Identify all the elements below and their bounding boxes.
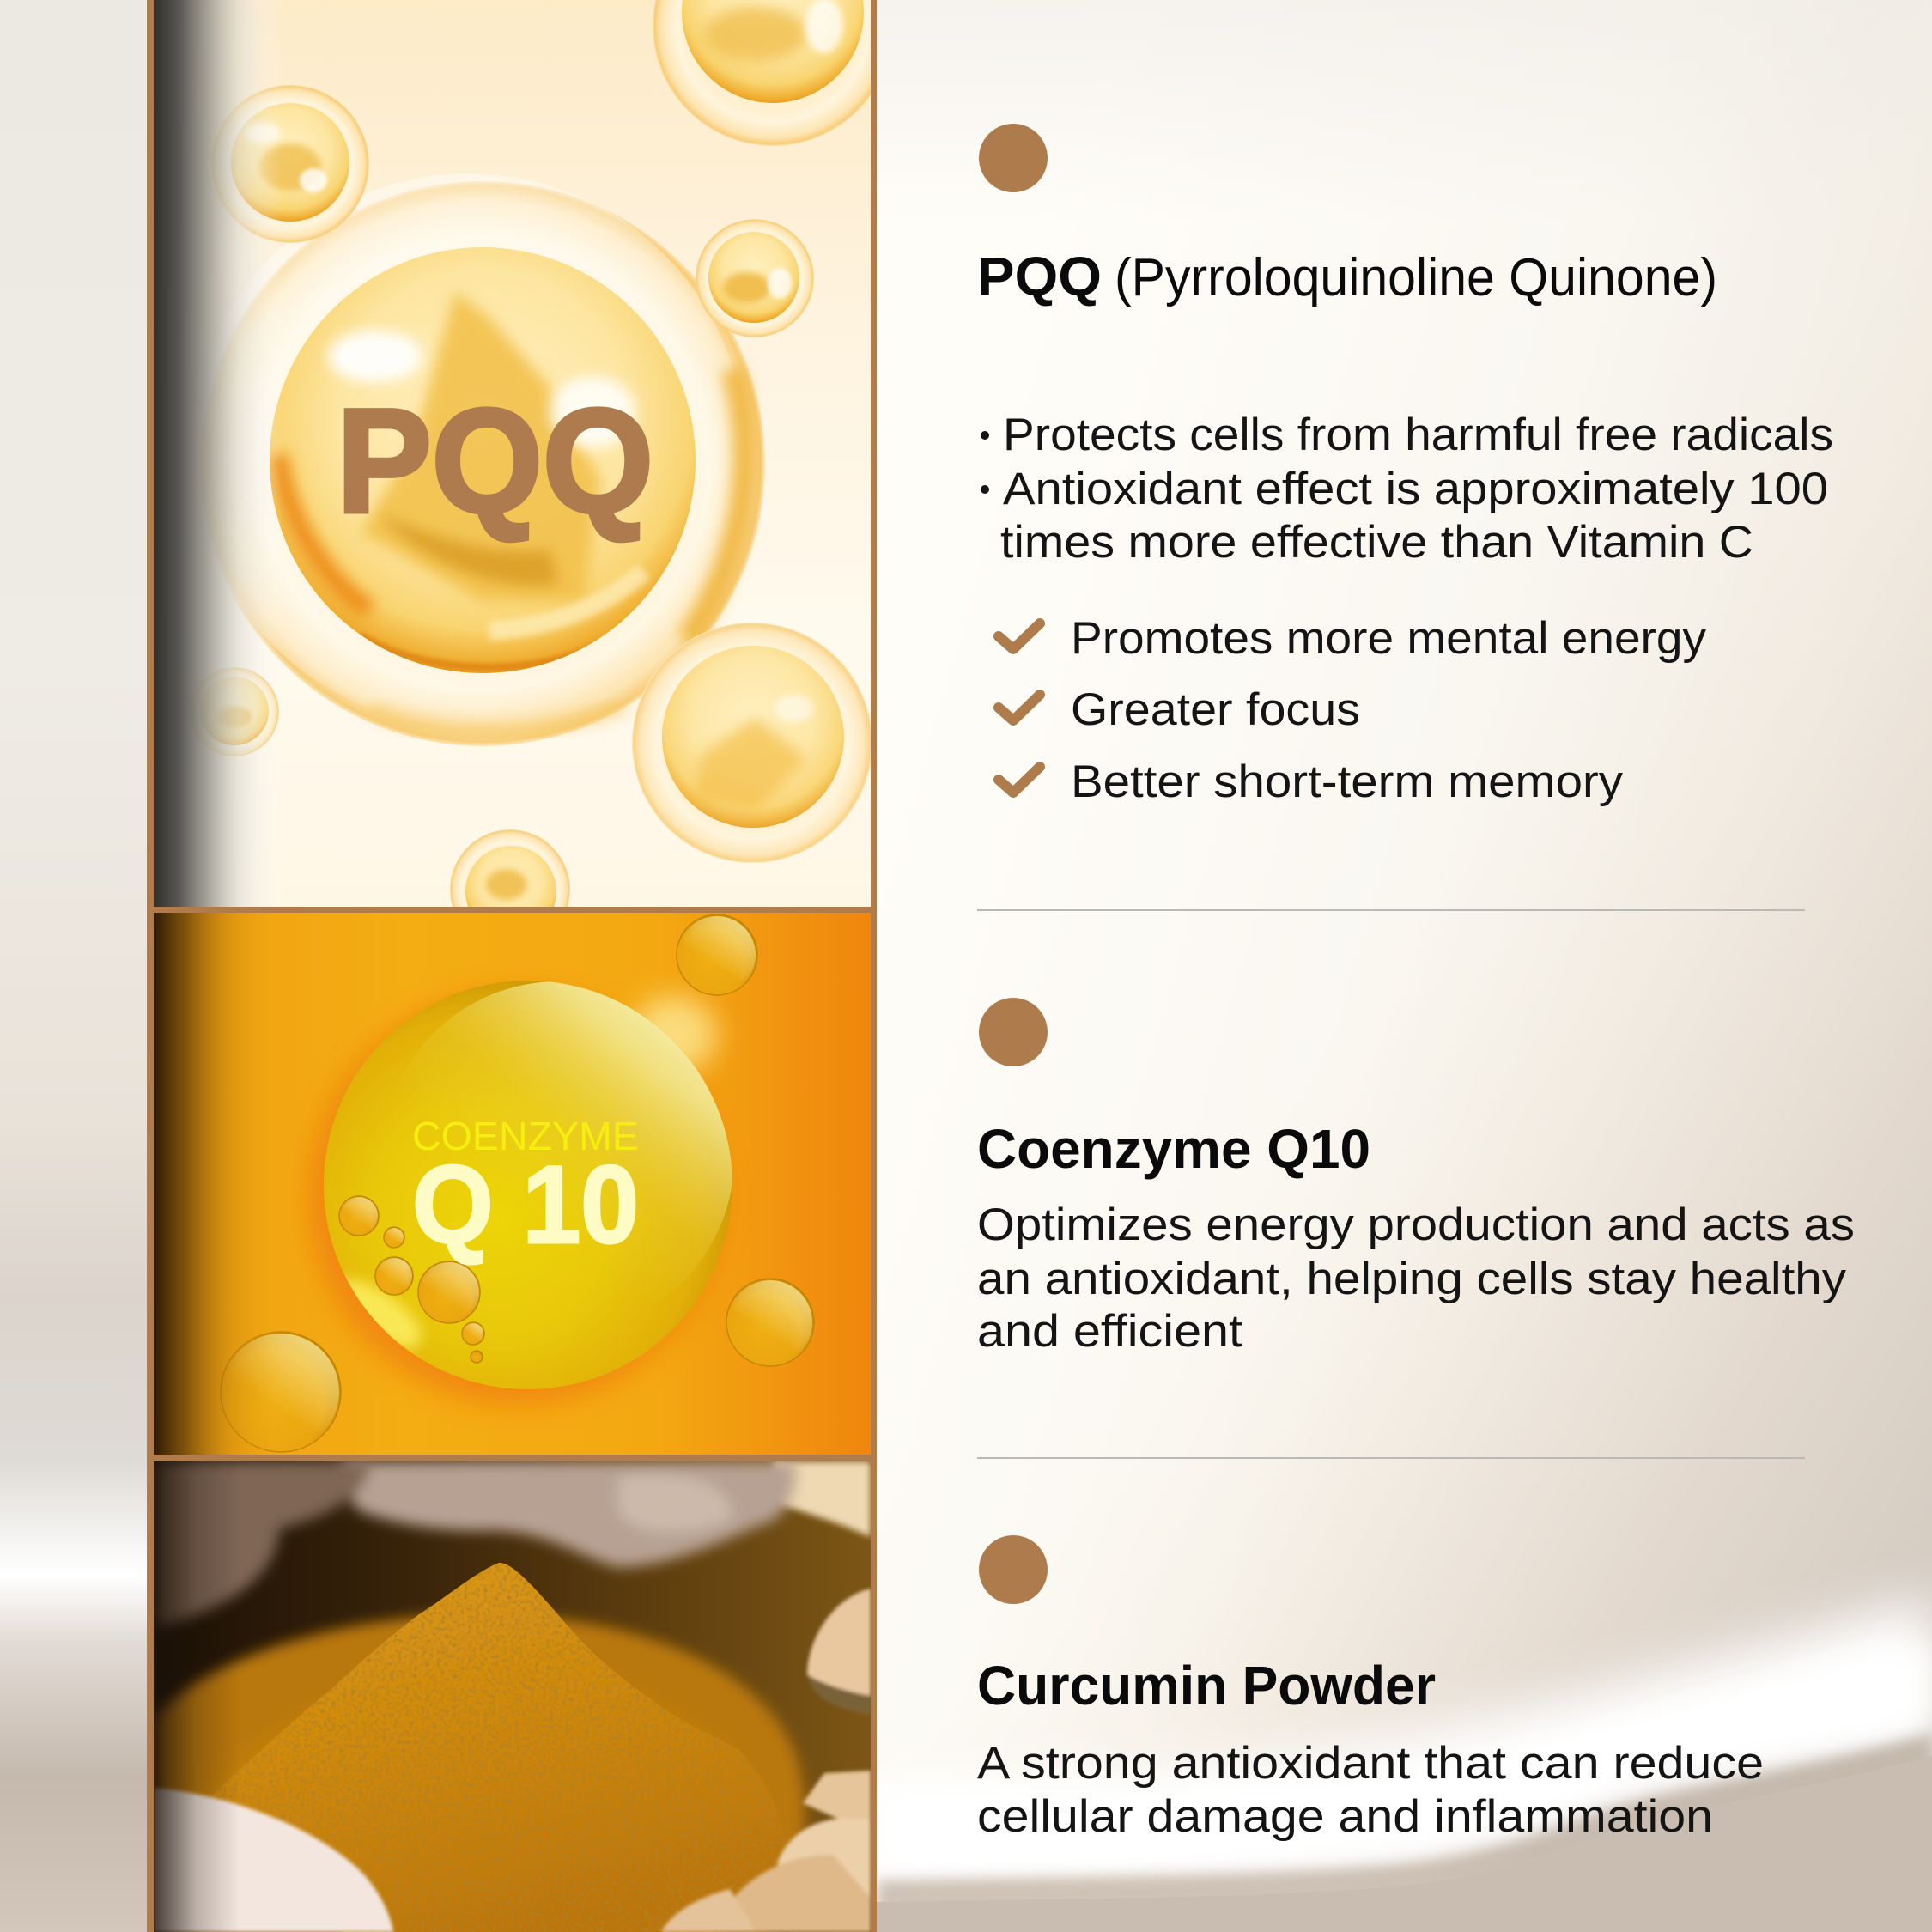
marker dot PQQ bbox=[979, 124, 1048, 192]
heading PQQ: PQQ bbox=[977, 246, 1102, 307]
panel frame bbox=[147, 0, 877, 1932]
ginger root left bbox=[154, 1461, 369, 1627]
section: Coenzyme Q10 bbox=[977, 998, 1855, 1357]
description curcumin bbox=[977, 1738, 1764, 1842]
small bubble top left bbox=[211, 85, 369, 243]
description curcumin: A strong antioxidant that can reduce bbox=[977, 1738, 1764, 1789]
turmeric pile bbox=[206, 1563, 790, 1932]
bubble top right bbox=[653, 0, 893, 146]
description Q10 bbox=[977, 1200, 1855, 1357]
description curcumin: cellular damage and inflammation bbox=[977, 1791, 1713, 1842]
heading Coenzyme Q10: Coenzyme Q10 bbox=[977, 1118, 1370, 1180]
bullet list: times more effective than Vitamin C bbox=[1000, 517, 1753, 568]
description Q10: an antioxidant, helping cells stay healthy bbox=[977, 1254, 1847, 1304]
small bubble left bbox=[190, 667, 279, 756]
bullet list: Antioxidant effect is approximately 100 bbox=[1003, 464, 1828, 514]
cream corner bbox=[773, 1461, 871, 1537]
bubble bottom bbox=[450, 829, 570, 907]
COENZYME label: COENZYME bbox=[412, 1114, 639, 1158]
ginger slices right bbox=[661, 1589, 871, 1932]
left dark fade bbox=[154, 1461, 240, 1932]
panel: curcumin powder photo bbox=[154, 1461, 871, 1932]
drop glow bbox=[309, 992, 721, 1404]
Q 10 label: Q 10 bbox=[412, 1144, 639, 1267]
heading PQQ: (Pyrroloquinoline Quinone) bbox=[1115, 248, 1717, 307]
large golden drop bbox=[324, 981, 734, 1389]
big PQQ bubble bbox=[192, 173, 765, 746]
left dark fade bbox=[154, 0, 283, 907]
bullet list bbox=[981, 410, 1833, 568]
droplets bbox=[221, 914, 814, 1452]
ginger root top bbox=[342, 1461, 795, 1567]
section: PQQ bbox=[977, 124, 1833, 807]
heading Curcumin Powder: Curcumin Powder bbox=[977, 1655, 1436, 1716]
marker dot curcumin bbox=[979, 1535, 1048, 1604]
check item: focus: Greater focus bbox=[1071, 684, 1360, 735]
bullet list: Protects cells from harmful free radicals bbox=[1003, 410, 1833, 460]
marker dot Q10 bbox=[979, 998, 1048, 1066]
PQQ label: PQQ bbox=[337, 379, 653, 544]
small bubble right bbox=[696, 219, 814, 337]
turmeric dish bbox=[154, 1614, 805, 1932]
bubble lower right bbox=[632, 623, 872, 863]
check item: mental energy: Promotes more mental energy bbox=[1071, 613, 1707, 664]
panel: PQQ bubbles bbox=[154, 0, 893, 950]
section: Curcumin Powder bbox=[977, 1535, 1764, 1842]
description Q10: and efficient bbox=[977, 1306, 1242, 1357]
check item: memory: Better short-term memory bbox=[1071, 756, 1624, 807]
left dark fade bbox=[154, 913, 283, 1455]
description Q10: Optimizes energy production and acts as bbox=[977, 1200, 1855, 1250]
panel: Coenzyme Q10 bbox=[154, 913, 871, 1455]
white scoop bbox=[154, 1788, 393, 1932]
